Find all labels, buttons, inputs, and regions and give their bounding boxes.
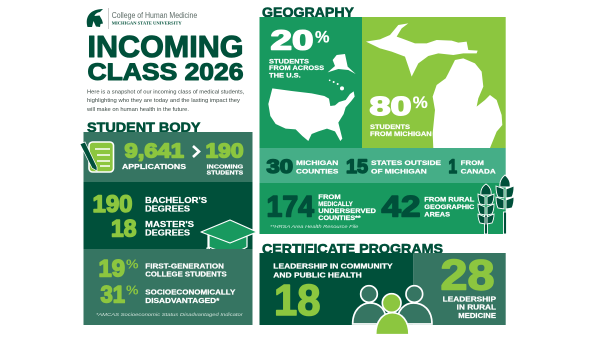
intro text: highlighting who they are today and the lasting impact they [87,98,240,104]
panel: counties, states, Canada: COUNTIES [296,168,339,175]
panel: underserved and rural: FROM [318,194,341,201]
panel: students from Michigan: FROM MICHIGAN [370,131,432,138]
panel: counties, states, Canada: MICHIGAN [296,160,338,167]
panel: rural medicine: 28 [440,252,494,300]
panel: demographics: 19 [98,256,125,282]
panel: demographics: SOCIOECONOMICALLY [145,290,236,297]
panel: rural medicine: MEDICINE [458,313,496,320]
panel: students from across the U.S.: FROM ACROSS [269,65,324,72]
panel: demographics: 31 [100,282,125,308]
panel: demographics [84,249,252,325]
panel: counties, states, Canada: CANADA [461,168,496,175]
panel: rural medicine: IN RURAL [457,305,496,312]
panel: students from Michigan [362,17,506,148]
panel: applications: STUDENTS [207,170,244,176]
panel: community and public health: AND PUBLIC HEALTH [273,272,362,279]
panel: underserved and rural: **HRSA Area Health Resource File [270,224,359,229]
title [88,29,244,86]
panel: degrees: MASTER'S [145,219,194,229]
panel: applications: APPLICATIONS [122,162,186,171]
panel: students from across the U.S. [260,17,362,148]
logo: college of human medicine: College of Human Medicine [112,11,198,20]
panel: counties, states, Canada: 15 [346,156,368,178]
panel: degrees: DEGREES [145,204,190,214]
panel: underserved and rural: GEOGRAPHIC [424,204,475,211]
panel: students from across the U.S.: % [315,28,330,46]
heading: student body: STUDENT BODY [87,120,200,135]
panel: underserved and rural: FROM RURAL [424,197,474,204]
panel: students from Michigan: % [413,93,428,112]
logo: college of human medicine: MICHIGAN STATE UNIVERSITY [112,20,182,25]
panel: counties, states, Canada: 30 [266,156,293,178]
panel: underserved and rural: UNDERSERVED [318,208,376,215]
panel: counties, states, Canada [260,148,506,183]
map: Michigan [366,23,502,148]
arrow: greater than [193,146,199,157]
panel: counties, states, Canada: FROM [461,160,484,167]
panel: counties, states, Canada: OF MICHIGAN [371,168,427,175]
panel: community and public health: 18 [274,276,320,325]
panel: demographics: % [126,284,138,298]
intro text: Here is a snapshot of our incoming class of medical students, [87,89,244,95]
title: INCOMING [88,29,244,64]
panel: underserved and rural: AREAS [424,211,451,218]
panel: students from across the U.S.: 20 [270,25,314,56]
panel: underserved and rural [260,175,514,234]
panel: community and public health: LEADERSHIP IN COMMUNITY [273,264,393,271]
icon: wheat [478,175,514,234]
panel: demographics: COLLEGE STUDENTS [145,271,227,278]
icon: notepad and pencil [80,142,114,172]
panel: students from Michigan: STUDENTS [370,124,410,131]
panel: underserved and rural: 42 [382,190,420,224]
title: CLASS 2026 [88,59,244,86]
panel: underserved and rural: COUNTIES** [318,215,361,222]
intro text: will make on human health in the future. [87,107,189,113]
panel: counties, states, Canada: 1 [448,156,457,178]
panel: rural medicine: LEADERSHIP [443,296,496,303]
intro text [87,89,244,113]
logo: college of human medicine [87,8,198,29]
panel: applications: 190 [206,140,244,162]
panel: degrees [84,182,257,257]
panel: degrees: DEGREES [145,227,190,237]
panel: students from Michigan: 80 [370,91,412,121]
panel: demographics: DISADVANTAGED* [145,298,220,305]
panel: demographics: % [126,258,138,272]
icon: group of people [353,286,432,335]
panel: applications: INCOMING [207,164,243,170]
panel: applications [80,132,252,182]
panel: applications: 9,641 [124,140,184,162]
panel: degrees: 18 [111,216,136,242]
panel: demographics: FIRST-GENERATION [145,264,224,271]
panel: rural medicine [413,252,506,325]
panel: community and public health [260,253,413,325]
panel: counties, states, Canada: STATES OUTSIDE [371,160,442,167]
panel: underserved and rural: 174 [266,190,315,224]
panel: underserved and rural: MEDICALLY [318,201,353,208]
icon: graduation cap [201,220,257,257]
panel: students from across the U.S.: STUDENTS [269,58,309,65]
heading: geography: GEOGRAPHY [262,4,355,20]
panel: degrees: 190 [92,191,132,218]
heading: certificate programs: CERTIFICATE PROGRAMS [262,240,443,256]
panel: students from across the U.S.: THE U.S. [269,72,301,79]
map: United States [268,54,356,141]
panel: degrees: BACHELOR'S [145,195,207,205]
panel: demographics: *AMCAS Socioeconomic Status Disadvantaged Indicator [96,312,244,317]
